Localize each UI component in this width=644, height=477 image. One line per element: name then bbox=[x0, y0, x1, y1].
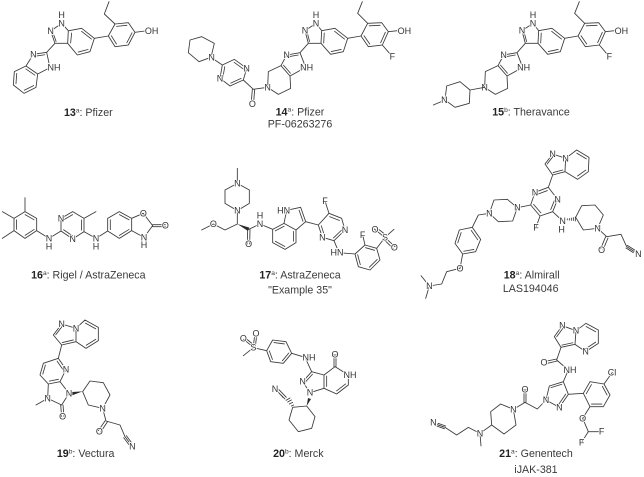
structure 21: N bbox=[543, 395, 549, 405]
caption 19: b bbox=[69, 448, 73, 455]
structure 17: O bbox=[210, 219, 217, 229]
structure 18: N bbox=[635, 249, 642, 259]
structure 14: H bbox=[313, 10, 319, 20]
structure 19: N bbox=[66, 388, 72, 398]
caption 17: a bbox=[271, 270, 275, 277]
structure 16: H bbox=[93, 242, 99, 252]
structure 14: N bbox=[264, 82, 271, 92]
structure 17: F bbox=[322, 196, 328, 206]
panel: compound 21 bbox=[430, 321, 616, 476]
structure 16: H bbox=[141, 240, 147, 250]
structure 16: N bbox=[58, 213, 64, 223]
structure 21: N bbox=[510, 404, 517, 414]
structure 18: N bbox=[532, 187, 538, 197]
code name 21: iJAK-381 bbox=[514, 464, 558, 476]
structure 17: F bbox=[360, 230, 366, 240]
structure 21: NH bbox=[564, 365, 576, 375]
panel: compound 19 bbox=[36, 319, 136, 460]
structure 17: H bbox=[257, 210, 263, 220]
caption 13: a bbox=[76, 107, 80, 114]
structure 18: N bbox=[554, 194, 561, 204]
panel: compound 18 bbox=[421, 149, 642, 298]
structure 20: O bbox=[331, 349, 338, 359]
structure 15: N bbox=[500, 50, 507, 60]
caption 13: : Pfizer bbox=[80, 107, 113, 119]
structure 21: N bbox=[573, 326, 579, 336]
caption 20: 20 bbox=[273, 448, 285, 460]
structure 13: N bbox=[58, 18, 65, 28]
structure 18: F bbox=[533, 222, 539, 232]
panel: compound 20 bbox=[240, 328, 356, 460]
structure 18: N bbox=[486, 208, 493, 218]
structure 21: F bbox=[599, 427, 605, 437]
structure 17: O bbox=[245, 239, 252, 249]
structure 21: O bbox=[579, 413, 586, 423]
panel: compound 17 bbox=[202, 168, 398, 297]
hashed wedge bbox=[286, 398, 294, 406]
structure 14 bbox=[188, 2, 411, 109]
structure 19: N bbox=[63, 364, 69, 374]
panel: compound 13 bbox=[13, 2, 158, 119]
structure 21: N bbox=[556, 402, 563, 412]
structure 20: NH bbox=[303, 352, 315, 362]
structure 17: N bbox=[342, 225, 348, 235]
caption 21: : Genentech bbox=[515, 448, 573, 460]
structure 17: O bbox=[371, 224, 378, 234]
structure 16: N bbox=[141, 232, 147, 242]
structure 18: H bbox=[558, 224, 565, 234]
structure 16: O bbox=[162, 221, 169, 231]
caption 17: : AstraZeneca bbox=[275, 270, 341, 282]
structure 15 bbox=[433, 2, 628, 107]
structure 17: N bbox=[234, 178, 241, 188]
code name 17: "Example 35" bbox=[268, 285, 332, 297]
structure 14: N bbox=[283, 50, 290, 60]
structure 18: N bbox=[426, 281, 433, 291]
structure 14: N bbox=[243, 63, 250, 73]
structure 17: N bbox=[257, 219, 263, 229]
caption 15: : Theravance bbox=[508, 107, 570, 119]
structure 20: N bbox=[307, 388, 313, 398]
structure 18 bbox=[421, 149, 642, 298]
structure 20: NH bbox=[344, 370, 356, 380]
structure 15: N bbox=[519, 26, 525, 36]
caption 21: a bbox=[511, 448, 515, 455]
panel: compound 15 bbox=[433, 2, 628, 119]
code name 18: LAS194046 bbox=[503, 283, 559, 295]
bold wedge bbox=[72, 391, 83, 395]
caption 15: b bbox=[504, 107, 508, 114]
caption 16: : Rigel / AstraZeneca bbox=[47, 270, 146, 282]
structure 15: H bbox=[530, 10, 536, 20]
caption 18: a bbox=[516, 270, 520, 277]
structure 17 bbox=[202, 168, 398, 270]
structure 21: F bbox=[579, 437, 585, 447]
structure 18: N bbox=[514, 203, 521, 213]
caption 13: 13 bbox=[64, 107, 76, 119]
structure 17: N bbox=[319, 232, 326, 242]
structure 21: N bbox=[559, 321, 566, 331]
structure 14: N bbox=[208, 52, 215, 62]
structure 14: F bbox=[390, 52, 396, 62]
structure 18: N bbox=[594, 223, 601, 233]
structure 14: N bbox=[302, 26, 308, 36]
structure 17: S bbox=[382, 232, 388, 242]
structure 15: N bbox=[530, 18, 536, 28]
structure 16: H bbox=[46, 242, 52, 252]
caption 17: 17 bbox=[259, 270, 271, 282]
structure 21: O bbox=[521, 384, 528, 394]
structure 17: HN bbox=[331, 248, 343, 258]
structure 13: N bbox=[30, 49, 37, 59]
structure 19: O bbox=[96, 427, 103, 437]
structure 19: N bbox=[99, 403, 106, 413]
structure 16 bbox=[2, 198, 169, 252]
caption 14: a bbox=[287, 107, 291, 114]
caption 16: a bbox=[43, 270, 47, 277]
structure 17: N bbox=[234, 206, 241, 216]
caption 18: : Almirall bbox=[519, 270, 560, 282]
structure 15: OH bbox=[615, 26, 628, 36]
structure 18: N bbox=[562, 153, 569, 163]
structure 20: O bbox=[252, 328, 259, 338]
structure 13: NH bbox=[48, 63, 60, 73]
structure 16: N bbox=[93, 233, 99, 243]
structure 20: O bbox=[240, 333, 247, 343]
structure 13 bbox=[13, 2, 158, 93]
structure 15: N bbox=[441, 95, 448, 105]
structure 14: N bbox=[217, 73, 223, 83]
caption 19: 19 bbox=[57, 448, 69, 460]
code name 14: PF-06263276 bbox=[268, 119, 332, 131]
structure 13: N bbox=[47, 26, 54, 36]
structure 14: OH bbox=[398, 26, 411, 36]
panel: compound 16 bbox=[2, 198, 169, 282]
bold wedge bbox=[237, 224, 249, 231]
caption 19: : Vectura bbox=[72, 448, 115, 460]
structure 17: HN bbox=[277, 205, 290, 215]
caption 20: : Merck bbox=[289, 448, 324, 460]
structure 19: N bbox=[44, 393, 51, 403]
structure 13: H bbox=[58, 10, 65, 20]
structure 14: N bbox=[313, 18, 319, 28]
caption 15: 15 bbox=[492, 107, 504, 119]
structure 16: O bbox=[140, 208, 147, 218]
structure 21 bbox=[430, 321, 616, 447]
structure 14: O bbox=[249, 99, 256, 109]
structure 21: O bbox=[540, 358, 547, 368]
structure 19: N bbox=[73, 323, 79, 333]
caption 20: b bbox=[285, 448, 289, 455]
caption 14: : Pfizer bbox=[291, 106, 325, 118]
caption 21: 21 bbox=[499, 448, 511, 460]
structure 18: O bbox=[456, 263, 463, 273]
hashed wedge bbox=[567, 217, 575, 221]
structure 15: N bbox=[481, 82, 488, 92]
structure 13: OH bbox=[145, 26, 158, 36]
structure 16: N bbox=[46, 233, 52, 243]
caption 18: 18 bbox=[504, 270, 516, 282]
structure 15: F bbox=[607, 52, 613, 62]
structure 20: S bbox=[250, 343, 256, 353]
structure 20: N bbox=[272, 384, 278, 394]
structure 19 bbox=[36, 319, 136, 452]
structure 21: N bbox=[477, 428, 483, 438]
caption 14: 14 bbox=[276, 106, 288, 118]
structure 15: NH bbox=[517, 62, 530, 72]
structure 21: Cl bbox=[608, 367, 616, 377]
structure 20 bbox=[240, 328, 356, 432]
structure 19: N bbox=[58, 319, 65, 329]
structure 18: O bbox=[598, 245, 605, 255]
structure 19: O bbox=[59, 412, 66, 422]
structure 16: N bbox=[69, 234, 76, 244]
structure 21: N bbox=[582, 347, 589, 357]
structure 17: O bbox=[391, 243, 398, 253]
caption 16: 16 bbox=[31, 270, 43, 282]
structure 18: N bbox=[549, 149, 556, 159]
structure 14: NH bbox=[300, 62, 313, 72]
structure 20: N bbox=[299, 377, 306, 387]
structure 19: N bbox=[129, 442, 136, 452]
panel: compound 14 bbox=[188, 2, 411, 131]
structure 18: N bbox=[559, 216, 566, 226]
bold wedge bbox=[307, 398, 311, 406]
structure 21: N bbox=[430, 418, 437, 428]
